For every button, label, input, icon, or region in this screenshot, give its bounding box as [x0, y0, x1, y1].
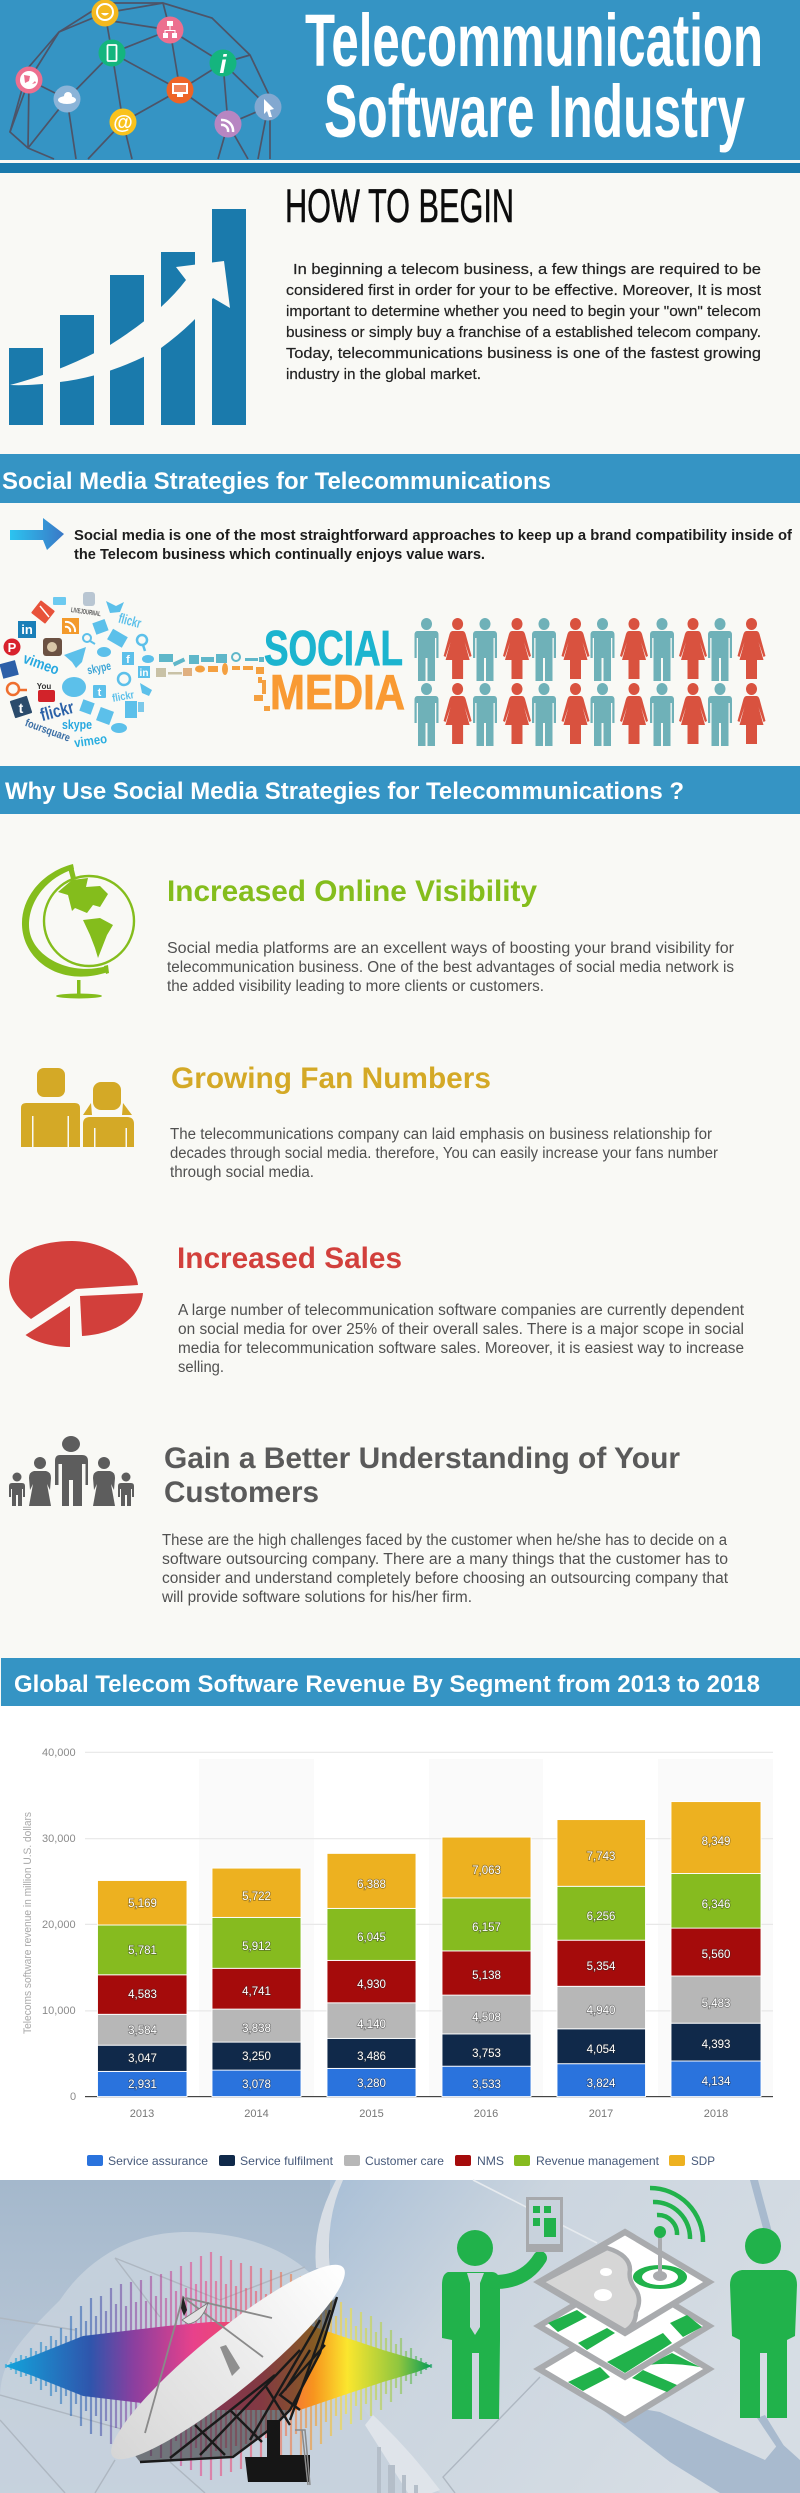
sound wave spectrum: [5, 2252, 432, 2480]
illustration: social network icon cloud: LIVEJOURNAL: [70, 607, 102, 618]
bar 2016: 3,753: [472, 2048, 501, 2060]
panel: increased online visibility: [22, 864, 734, 998]
text block: sales body: A large number of telecommunication software companies are currently dependent: [178, 1302, 745, 1319]
text block: fan numbers body: through social media.: [170, 1164, 314, 1181]
bar 2015: [327, 1853, 416, 2097]
illustration: social network icon cloud: vimeo: [73, 731, 108, 750]
text block: fan numbers body: The telecommunications company can laid emphasis on business relationship for: [170, 1126, 712, 1143]
wordmark: social media: [264, 622, 405, 720]
legend: Service fulfilment: [240, 2154, 334, 2168]
bar 2016: 4,508: [472, 2012, 501, 2024]
illustration: social network icon cloud: in: [140, 668, 148, 679]
heading band: global telecom software revenue: Global Telecom Software Revenue By Segment from 2013 to 2018: [14, 1671, 760, 1698]
illustration: social network icon cloud: skype: [86, 659, 112, 677]
icon: green man standing: [730, 2228, 797, 2418]
heading band: global telecom software revenue: [1, 1658, 800, 1706]
illustration: social network icon cloud: t: [19, 700, 24, 716]
illustration: social network icon cloud: f: [126, 654, 130, 666]
bar 2014: 5,912: [242, 1941, 271, 1953]
title: [305, 0, 763, 153]
pictogram: crowd of men and women: [414, 618, 766, 746]
illustration: social network icon cloud: [0, 592, 154, 750]
heading: gain a better understanding: Customers: [164, 1476, 319, 1509]
legend: Service assurance: [108, 2154, 208, 2168]
illustration: satellite dish photo panel: [0, 2180, 800, 2493]
icon: family of grey figures: [9, 1436, 134, 1506]
icon: red pie chart: [9, 1241, 143, 1347]
heading band: social media strategies: Social Media Strategies for Telecommunications: [2, 468, 551, 495]
text block: sales body: selling.: [178, 1359, 224, 1376]
illustration: social network icon cloud: flickr: [117, 610, 144, 631]
icon: tablet: [527, 2198, 562, 2251]
icon: layered map with wifi pin: [539, 2188, 709, 2420]
y axis labels: 40,000: [42, 1747, 76, 1759]
heading: gain a better understanding: [164, 1442, 680, 1509]
x axis labels: 2015: [359, 2108, 384, 2120]
heading: increased online visibility: Increased Online Visibility: [167, 875, 537, 908]
illustration: social network icon cloud: vimeo: [21, 650, 61, 679]
heading band: why use social media: [0, 766, 800, 814]
icon nodes: i: [219, 49, 227, 79]
text block: visibility body: the added visibility leading to more clients or customers.: [167, 978, 544, 995]
text block: intro paragraph: considered first in order for your to be effective. Moreover, It is most: [286, 282, 762, 299]
text block: visibility body: telecommunication business. One of the best advantages of social media network is: [167, 959, 734, 976]
panel: social media strategies: [0, 454, 800, 750]
wordmark: social media: MEDIA: [270, 666, 405, 720]
panel: growing fan numbers: [21, 1062, 718, 1181]
bar 2017: 7,743: [587, 1851, 615, 1863]
bar 2013: 5,781: [128, 1945, 157, 1957]
text block: intro paragraph: important to determine whether you need to begin your "own" telecom: [286, 303, 761, 320]
text block: sales body: media for telecommunication software sales. Moreover, it is easiest way to increase: [178, 1340, 744, 1357]
y axis labels: 0: [70, 2091, 76, 2103]
heading band: why use social media: Why Use Social Media Strategies for Telecommunications ?: [5, 778, 684, 805]
x axis labels: 2017: [589, 2108, 613, 2120]
text block: sales body: [178, 1302, 745, 1376]
bar 2016: 3,533: [472, 2079, 501, 2091]
bar 2014: 3,078: [242, 2079, 271, 2091]
icon: blue arrow: [10, 518, 64, 550]
text block: social media intro: [74, 528, 792, 563]
legend: Customer care: [365, 2154, 444, 2168]
legend: [87, 2154, 715, 2168]
banner: [0, 0, 800, 173]
text block: intro paragraph: [286, 261, 762, 383]
text block: intro paragraph: In beginning a telecom business, a few things are required to be: [293, 261, 761, 278]
illustration: social network icon cloud: flickr: [111, 689, 136, 705]
text block: customers body: These are the high challenges faced by the customer when he/she has to decide on a: [162, 1532, 727, 1549]
panel: increased sales: [9, 1241, 745, 1376]
icon nodes: @: [113, 112, 133, 134]
bar 2015: 4,140: [357, 2019, 386, 2031]
icon: rising bar chart: [9, 209, 246, 425]
bar 2017: 4,940: [587, 2005, 615, 2017]
bar 2018: [671, 1802, 761, 2097]
text block: social media intro: the Telecom business which continually enjoys value wars.: [74, 547, 485, 563]
bar 2014: 5,722: [242, 1891, 271, 1903]
text block: intro paragraph: industry in the global market.: [286, 366, 481, 383]
panel: how to begin: [9, 179, 762, 425]
bar 2016: 5,138: [472, 1970, 501, 1982]
x axis labels: [130, 2108, 728, 2120]
satellite dish: [94, 2244, 362, 2485]
bar 2015: 6,388: [357, 1879, 386, 1891]
text block: fan numbers body: decades through social media. therefore, You can easily increase your fans number: [170, 1145, 718, 1162]
icon nodes: [16, 0, 282, 138]
y axis labels: [42, 1747, 76, 2103]
panel: revenue chart: [0, 1658, 800, 2180]
bar 2018: 5,483: [702, 1998, 730, 2010]
heading: growing fan numbers: Growing Fan Numbers: [171, 1062, 491, 1095]
stacked bar chart: [0, 1706, 800, 2180]
bar 2017: 5,354: [587, 1961, 616, 1973]
heading: increased sales: Increased Sales: [177, 1242, 402, 1275]
illustration: social network icon cloud: flickr: [38, 697, 76, 725]
bar 2014: [212, 1868, 301, 2097]
illustration: social network icon cloud: in: [21, 622, 33, 637]
bar 2018: 4,393: [702, 2039, 730, 2051]
x axis labels: 2016: [474, 2108, 498, 2120]
bar 2013: 3,584: [128, 2025, 157, 2037]
bar 2016: [442, 1837, 531, 2097]
bar 2013: 5,169: [128, 1898, 157, 1910]
bar 2015: 4,930: [357, 1979, 386, 1991]
bar 2013: 2,931: [128, 2079, 157, 2091]
bar 2016: 7,063: [472, 1865, 501, 1877]
x axis labels: 2018: [704, 2108, 728, 2120]
bar 2018: 8,349: [702, 1836, 730, 1848]
text block: customers body: [161, 1532, 729, 1606]
legend: Revenue management: [536, 2154, 660, 2168]
legend: NMS: [477, 2154, 504, 2168]
bar 2017: 4,054: [587, 2044, 616, 2056]
wordmark: social media: SOCIAL: [264, 622, 403, 676]
illustration: social network icon cloud: skype: [62, 717, 92, 732]
bar 2013: 4,583: [128, 1989, 157, 2001]
bar 2016: 6,157: [472, 1922, 501, 1934]
bar 2018: 6,346: [702, 1899, 730, 1911]
network globe illustration: [10, 0, 282, 159]
y axis labels: 10,000: [42, 2005, 76, 2017]
illustration: icon trail to wordmark: [156, 653, 270, 711]
text block: customers body: will provide software solutions for his/her firm.: [161, 1589, 472, 1606]
text block: intro paragraph: Today, telecommunications business is one of the fastest growing: [286, 345, 761, 362]
text block: visibility body: [167, 940, 734, 995]
text block: sales body: on social media for over 25% of their overall sales. There is a major scope in social: [178, 1321, 744, 1338]
heading band: social media strategies: [0, 454, 800, 503]
text block: intro paragraph: business or simply buy a franchise of a established telecom company.: [286, 324, 761, 341]
bar 2015: 3,486: [357, 2051, 386, 2063]
text block: customers body: consider and understand completely before choosing an outsourcing company that: [162, 1570, 729, 1587]
text block: visibility body: Social media platforms are an excellent ways of boosting your brand visibility for: [167, 940, 734, 957]
bar 2017: [557, 1820, 646, 2097]
y axis title: Telecoms software revenue in million U.S. dollars: [22, 1812, 34, 2034]
bar 2017: 3,824: [587, 2078, 616, 2090]
bar 2014: 4,741: [242, 1986, 271, 1998]
legend: SDP: [691, 2154, 715, 2168]
panel: understanding customers: [9, 1436, 729, 1606]
x axis labels: 2013: [130, 2108, 154, 2120]
heading: gain a better understanding: Gain a Better Understanding of Your: [164, 1442, 680, 1475]
icon: two gold figures: [21, 1068, 134, 1147]
bar 2014: 3,250: [242, 2051, 271, 2063]
illustration: social network icon cloud: You: [37, 682, 51, 691]
bar 2018: 5,560: [702, 1949, 730, 1961]
text block: fan numbers body: [170, 1126, 718, 1181]
icon: green globe: [22, 864, 134, 998]
illustration: social network icon cloud: foursquare: [23, 717, 72, 745]
illustration: social network icon cloud: P: [8, 640, 17, 655]
y axis labels: 20,000: [42, 1919, 76, 1931]
illustration: social network icon cloud: t: [98, 687, 102, 699]
bar 2015: 3,280: [357, 2078, 386, 2090]
text block: social media intro: Social media is one of the most straightforward approaches to keep up a brand compatibility inside of: [74, 528, 792, 544]
bar 2017: 6,256: [587, 1911, 615, 1923]
bar 2015: 6,045: [357, 1932, 386, 1944]
icon: green man with tablet: [442, 2230, 540, 2419]
x axis labels: 2014: [244, 2108, 269, 2120]
bar 2018: 4,134: [702, 2076, 731, 2088]
bar 2014: 3,838: [242, 2023, 271, 2035]
bar 2013: [98, 1880, 187, 2097]
y axis labels: 30,000: [42, 1833, 76, 1845]
text block: customers body: software outsourcing company. There are a many things that the customer has to: [162, 1551, 728, 1568]
bar 2013: 3,047: [128, 2053, 157, 2065]
heading: how to begin: HOW TO BEGIN: [285, 179, 514, 232]
